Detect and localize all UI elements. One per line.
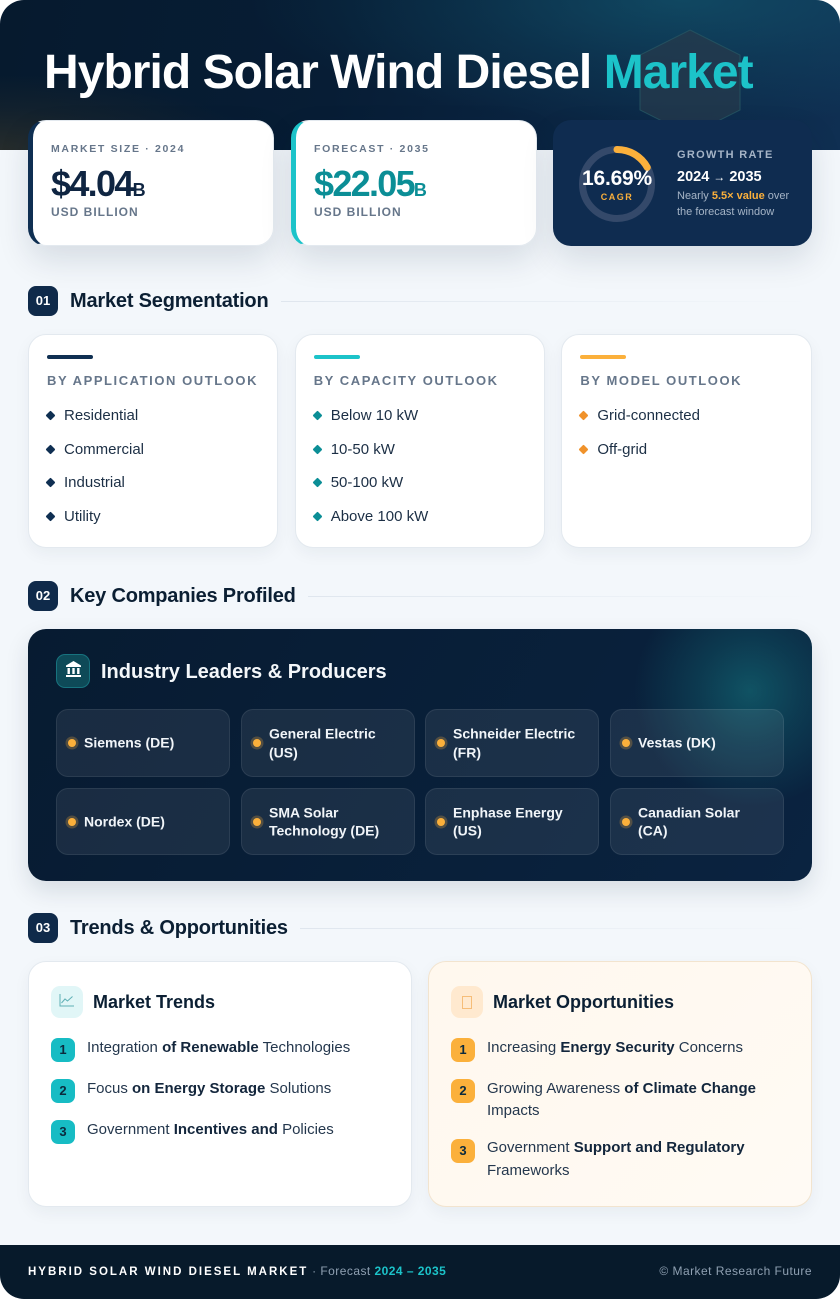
section heading: key companies: Key Companies Profiled: [70, 585, 296, 607]
growth label: GROWTH RATE: [677, 149, 774, 161]
company: Siemens (DE): [84, 735, 174, 751]
company: Nordex (DE): [84, 813, 165, 829]
company: [56, 788, 230, 855]
unit: USD BILLION: [314, 205, 402, 219]
trend: Government Incentives and Policies: [87, 1120, 334, 1138]
item: Utility: [64, 508, 101, 525]
panel: market opportunities: [428, 961, 812, 1207]
company: [241, 709, 415, 777]
item: Residential: [64, 407, 138, 424]
accent bar: [314, 355, 360, 359]
opportunity: Government Support and Regulatory Frameworks: [487, 1139, 745, 1178]
item: 50-100 kW: [331, 474, 403, 491]
panel heading: Market Opportunities: [493, 992, 674, 1012]
panel heading: Market Trends: [93, 992, 215, 1012]
section number 01: 01: [36, 293, 50, 308]
value: $22.05B: [314, 163, 427, 204]
header band: [0, 0, 840, 150]
section number 02: [28, 581, 58, 611]
section number 03: [28, 913, 58, 943]
number: 1: [59, 1042, 67, 1057]
decorative hexagon: [640, 30, 740, 120]
number: [51, 1038, 75, 1062]
item: Below 10 kW: [331, 407, 418, 424]
number: 3: [59, 1124, 67, 1139]
icon: placeholder glyph: [451, 986, 483, 1018]
CAGR value: 16.69%: [582, 167, 652, 190]
section number 03: 03: [36, 920, 50, 935]
title: Hybrid Solar Wind Diesel Market: [44, 46, 753, 99]
trend: Focus on Energy Storage Solutions: [87, 1080, 331, 1096]
accent bar: [580, 355, 626, 359]
item: 10-50 kW: [331, 441, 395, 458]
section heading: market segmentation: Market Segmentation: [70, 290, 268, 312]
card shadow: [28, 120, 274, 246]
company: [56, 709, 230, 777]
company: Schneider Electric (FR): [453, 725, 575, 760]
panel heading: BY APPLICATION OUTLOOK: [47, 373, 258, 388]
company: [610, 709, 784, 777]
number: [451, 1038, 475, 1062]
panel heading: BY MODEL OUTLOOK: [580, 373, 742, 388]
item: Above 100 kW: [331, 508, 428, 525]
icon: bank: [56, 654, 90, 688]
opportunity: Growing Awareness of Climate Change Impacts: [487, 1080, 756, 1119]
footer: [0, 1245, 840, 1299]
item: [46, 508, 101, 525]
CAGR ring: [579, 146, 655, 222]
trend: Integration of Renewable Technologies: [87, 1038, 350, 1056]
item: Off-grid: [597, 441, 647, 458]
number: [51, 1079, 75, 1103]
item: Grid-connected: [597, 407, 700, 424]
panel: model outlook: [561, 334, 812, 548]
company: Vestas (DK): [638, 735, 716, 751]
stat card: forecast: [291, 120, 537, 246]
icon: chart: [51, 986, 83, 1018]
unit: USD BILLION: [51, 205, 139, 219]
company: [610, 788, 784, 855]
number: [451, 1079, 475, 1103]
company: Canadian Solar (CA): [638, 804, 740, 838]
item: Commercial: [64, 441, 144, 458]
label: MARKET SIZE · 2024: [51, 143, 185, 155]
stat card: market size: [28, 120, 274, 246]
growth years: 2024 → 2035: [677, 169, 762, 185]
label: FORECAST · 2035: [314, 143, 430, 155]
item: Industrial: [64, 474, 125, 491]
panel: market trends: [28, 961, 412, 1207]
panel: application outlook: [28, 334, 278, 548]
panel: capacity outlook: [295, 334, 545, 548]
number: 3: [459, 1143, 467, 1158]
number: [51, 1120, 75, 1144]
number: 2: [59, 1083, 67, 1098]
section number 02: 02: [36, 588, 50, 603]
value: $4.04B: [51, 163, 146, 204]
company: [425, 788, 599, 855]
section heading: trends: Trends & Opportunities: [70, 917, 288, 939]
company: [241, 788, 415, 855]
footer credit: © Market Research Future: [659, 1264, 812, 1278]
company: Enphase Energy (US): [453, 804, 563, 838]
header warm corner glow: [0, 70, 280, 150]
panel heading: Industry Leaders & Producers: [101, 661, 387, 683]
panel: industry leaders: [28, 629, 812, 881]
company: General Electric (US): [269, 725, 376, 760]
company: [425, 709, 599, 777]
growth note: Nearly 5.5× value over the forecast window: [677, 190, 789, 218]
CAGR card: [553, 120, 812, 246]
panel heading: BY CAPACITY OUTLOOK: [314, 373, 499, 388]
opportunity: Increasing Energy Security Concerns: [487, 1038, 743, 1056]
number: [451, 1139, 475, 1163]
footer title: HYBRID SOLAR WIND DIESEL MARKET · Forecast 2024 – 2035: [28, 1264, 446, 1278]
accent bar: [47, 355, 93, 359]
CAGR label: CAGR: [601, 192, 633, 202]
section number 01: [28, 286, 58, 316]
card shadow: [291, 120, 537, 246]
number: 1: [459, 1042, 467, 1057]
company: SMA Solar Technology (DE): [269, 804, 379, 838]
number: 2: [459, 1083, 467, 1098]
